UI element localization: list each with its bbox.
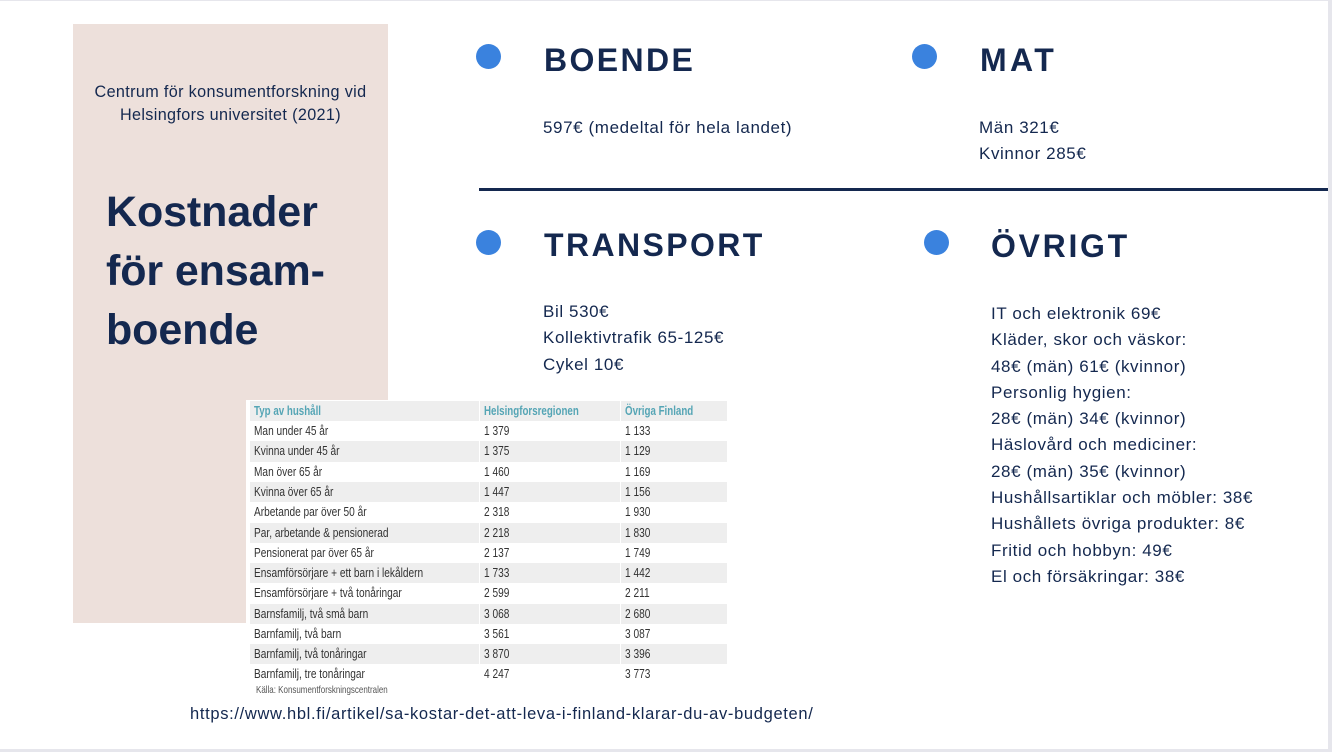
table: kostnader per hushåll: Kvinna under 45 år: [254, 444, 340, 458]
table: kostnader per hushåll: 2 318: [484, 505, 509, 519]
source url: https://www.hbl.fi/artikel/sa-kostar-det-att-leva-i-finland-klarar-du-av-budgeten/: [190, 705, 814, 723]
table: kostnader per hushåll: Ensamförsörjare + två tonåringar: [254, 586, 402, 600]
source text: [95, 82, 366, 124]
table: kostnader per hushåll: 2 137: [484, 546, 509, 560]
source text: Centrum för konsumentforskning vid: [95, 82, 366, 100]
table: kostnader per hushåll: Barnsfamilj, två små barn: [254, 606, 368, 620]
text: mat: Män 321€: [979, 118, 1059, 136]
table: kostnader per hushåll: Barnfamilj, tre tonåringar: [254, 667, 365, 681]
title: [106, 188, 325, 354]
table: kostnader per hushåll: 1 375: [484, 444, 509, 458]
table: kostnader per hushåll: 1 447: [484, 485, 509, 499]
text: övrigt: El och försäkringar: 38€: [991, 567, 1185, 586]
table: kostnader per hushåll: 3 773: [625, 667, 650, 681]
table: kostnader per hushåll: Kvinna över 65 år: [254, 485, 333, 499]
table: kostnader per hushåll: 1 460: [484, 465, 509, 479]
table: kostnader per hushåll: 1 129: [625, 444, 650, 458]
table: kostnader per hushåll: [246, 400, 727, 698]
text: övrigt: Hushållsartiklar och möbler: 38€: [991, 488, 1253, 507]
text: övrigt: Kläder, skor och väskor:: [991, 330, 1187, 349]
icon: bullet: [924, 230, 949, 255]
title: boende: [106, 306, 258, 354]
text: övrigt: Fritid och hobbyn: 49€: [991, 541, 1172, 560]
text: transport: [543, 302, 724, 374]
table: kostnader per hushåll: 4 247: [484, 667, 509, 681]
table: kostnader per hushåll: Arbetande par över 50 år: [254, 505, 367, 519]
table: kostnader per hushåll: 1 930: [625, 505, 650, 519]
table: kostnader per hushåll: 3 870: [484, 647, 509, 661]
section: transport: [476, 227, 765, 374]
table: kostnader per hushåll: 1 133: [625, 424, 650, 438]
text: övrigt: Hushållets övriga produkter: 8€: [991, 514, 1245, 533]
icon: bullet: [476, 230, 501, 255]
heading: boende: BOENDE: [544, 42, 695, 78]
text: övrigt: IT och elektronik 69€: [991, 304, 1161, 323]
text: mat: Kvinnor 285€: [979, 144, 1086, 163]
heading: mat: MAT: [980, 42, 1057, 78]
section: övrigt: [924, 228, 1253, 586]
text: övrigt: 28€ (män) 35€ (kvinnor): [991, 462, 1186, 481]
table: kostnader per hushåll: Källa: Konsumentforskningscentralen: [256, 684, 388, 696]
section: boende: [476, 42, 792, 136]
table: kostnader per hushåll: 1 733: [484, 566, 509, 580]
table: kostnader per hushåll: 1 749: [625, 546, 650, 560]
text: transport: Kollektivtrafik 65-125€: [543, 328, 724, 347]
table: kostnader per hushåll: Par, arbetande & pensionerad: [254, 526, 389, 540]
table: kostnader per hushåll: 1 830: [625, 526, 650, 540]
table: kostnader per hushåll: 1 156: [625, 485, 650, 499]
text: övrigt: Häslovård och mediciner:: [991, 435, 1197, 454]
title: Kostnader: [106, 188, 318, 236]
table: kostnader per hushåll: 2 680: [625, 606, 650, 620]
source text: Helsingfors universitet (2021): [120, 106, 341, 124]
text: transport: Cykel 10€: [543, 355, 624, 374]
table: kostnader per hushåll: 2 218: [484, 526, 509, 540]
table: kostnader per hushåll: Övriga Finland: [625, 404, 693, 418]
text: övrigt: 48€ (män) 61€ (kvinnor): [991, 357, 1186, 376]
table: kostnader per hushåll: 3 396: [625, 647, 650, 661]
table: kostnader per hushåll: 2 599: [484, 586, 509, 600]
table: kostnader per hushåll: 3 087: [625, 627, 650, 641]
text: övrigt: [991, 304, 1253, 586]
title: för ensam-: [106, 247, 325, 295]
table: kostnader per hushåll: 3 561: [484, 627, 509, 641]
table: kostnader per hushåll: Barnfamilj, två tonåringar: [254, 647, 367, 661]
text: övrigt: Personlig hygien:: [991, 383, 1132, 402]
table: kostnader per hushåll: 1 442: [625, 566, 650, 580]
table: kostnader per hushåll: Man under 45 år: [254, 424, 328, 438]
table: kostnader per hushåll: 3 068: [484, 606, 509, 620]
text: övrigt: 28€ (män) 34€ (kvinnor): [991, 409, 1186, 428]
table: kostnader per hushåll: Helsingforsregionen: [484, 404, 579, 418]
table: kostnader per hushåll: Ensamförsörjare + ett barn i lekåldern: [254, 566, 423, 580]
text: transport: Bil 530€: [543, 302, 609, 321]
heading: transport: TRANSPORT: [544, 227, 765, 263]
table: kostnader per hushåll: Man över 65 år: [254, 465, 322, 479]
section: mat: [912, 42, 1086, 163]
icon: bullet: [476, 44, 501, 69]
table: kostnader per hushåll: 1 379: [484, 424, 509, 438]
divider line: [479, 188, 1328, 191]
text: boende: 597€ (medeltal för hela landet): [543, 118, 792, 136]
text: mat: [979, 118, 1086, 163]
table: kostnader per hushåll: 1 169: [625, 465, 650, 479]
table: kostnader per hushåll: Typ av hushåll: [254, 404, 321, 418]
icon: bullet: [912, 44, 937, 69]
table: kostnader per hushåll: Pensionerat par över 65 år: [254, 546, 374, 560]
table: kostnader per hushåll: 2 211: [625, 586, 650, 600]
heading: övrigt: ÖVRIGT: [991, 228, 1130, 264]
panel: title card: [73, 24, 388, 623]
table: kostnader per hushåll: Barnfamilj, två barn: [254, 627, 341, 641]
